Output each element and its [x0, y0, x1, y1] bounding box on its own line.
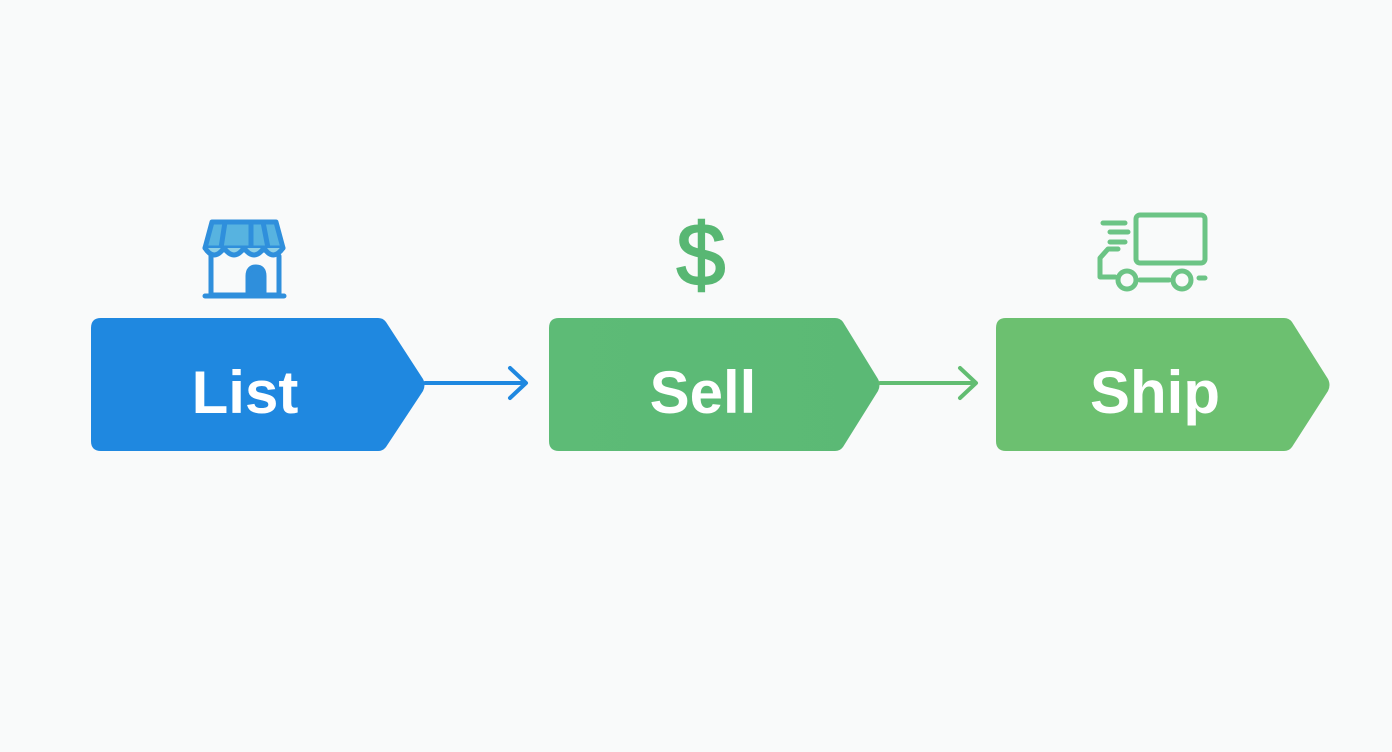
panel: sell	[549, 318, 880, 451]
icon: truck	[1100, 215, 1205, 289]
panel: ship	[996, 318, 1330, 451]
icon: storefront	[205, 222, 284, 296]
label: ship: Ship	[1090, 359, 1220, 426]
label: sell: Sell	[650, 359, 756, 426]
label: list: List	[192, 359, 298, 426]
icon: dollar: $	[677, 205, 725, 304]
arrow: sell to ship	[880, 368, 976, 398]
panel: list	[91, 318, 424, 451]
arrow: list to sell	[425, 368, 526, 398]
